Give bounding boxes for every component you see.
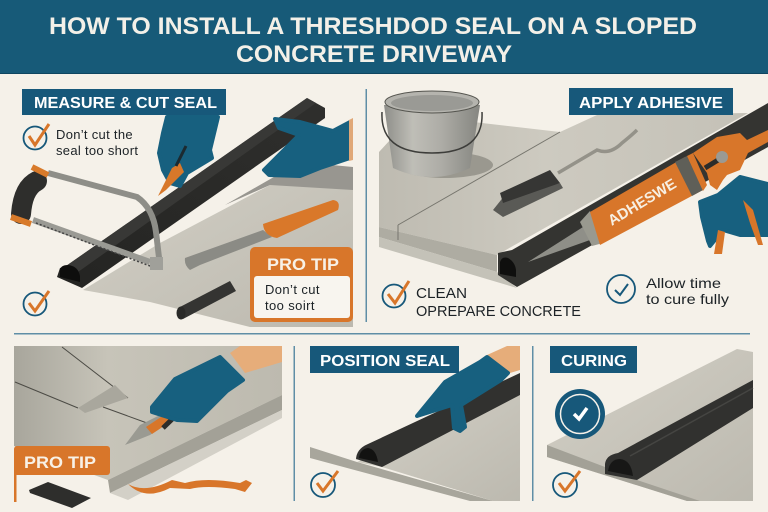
hand gripping seal — [264, 118, 353, 176]
tip: don't cut the seal too short: seal too short — [56, 143, 138, 158]
pro tip label — [14, 446, 110, 502]
rubber pad — [29, 482, 91, 508]
tip: allow time to cure fully — [607, 275, 729, 307]
pro tip label: PRO TIP — [24, 453, 96, 472]
rubber seal strip — [57, 98, 325, 288]
panel dividers — [14, 89, 750, 501]
tip: don't cut the seal too short — [24, 124, 138, 158]
check icon: curing — [553, 471, 580, 497]
title banner: CONCRETE DRIVEWAY — [236, 41, 512, 68]
step label: curing: CURING — [561, 353, 627, 370]
seal strip — [498, 103, 768, 287]
concrete surface — [83, 185, 353, 327]
step label: measure and cut seal — [22, 89, 226, 115]
step label: apply adhesive: APPLY ADHESIVE — [579, 95, 723, 112]
wire brush — [493, 130, 637, 217]
orange arrow — [128, 480, 252, 494]
step label: measure and cut seal: MEASURE & CUT SEAL — [34, 95, 217, 112]
pro tip box — [250, 247, 353, 322]
check icon: step 1 — [24, 291, 49, 316]
gloved hand — [417, 357, 508, 431]
check icon: position seal — [311, 471, 338, 497]
concrete — [547, 349, 753, 501]
seal — [605, 380, 753, 480]
hand with pencil — [158, 117, 218, 196]
panel: curing — [547, 349, 753, 501]
tip: allow time to cure fully: Allow time — [646, 275, 721, 291]
title banner: HOW TO INSTALL A THRESHDOD SEAL ON A SLOPED — [49, 13, 697, 40]
step label: curing — [550, 346, 637, 373]
hacksaw — [11, 167, 163, 270]
tip: don't cut the seal too short: Don’t cut the — [56, 127, 133, 142]
panel: measure and cut seal — [11, 98, 353, 327]
title banner — [0, 0, 768, 74]
caulk gun: ADHESWE — [605, 175, 679, 229]
pro tip box: Don’t cut — [265, 282, 320, 297]
seal — [356, 373, 520, 467]
step label: position seal — [310, 346, 459, 373]
metal bracket — [78, 385, 128, 413]
gloved hand — [700, 177, 768, 254]
concrete slab — [14, 346, 282, 500]
tip: allow time to cure fully: to cure fully — [646, 291, 729, 307]
concrete — [357, 393, 520, 501]
step label: position seal: POSITION SEAL — [320, 353, 450, 370]
panel: smoothing concrete with pro tip — [14, 346, 282, 502]
cut seal piece — [176, 281, 236, 320]
arm — [487, 346, 520, 373]
step label: apply adhesive — [569, 88, 733, 115]
pro tip box: PRO TIP — [267, 255, 339, 274]
panel: apply adhesive — [379, 91, 768, 288]
tip: clean prepare concrete — [382, 281, 581, 320]
tip: clean prepare concrete: CLEAN — [416, 285, 467, 302]
panel: position seal — [310, 346, 520, 501]
icon: curing badge — [555, 389, 605, 439]
bucket — [382, 91, 493, 178]
tip: clean prepare concrete: OPREPARE CONCRETE — [416, 303, 581, 320]
concrete slab — [379, 113, 748, 288]
pro tip box: too soirt — [265, 298, 315, 313]
chisel — [185, 200, 339, 270]
gloved hand with tool — [125, 346, 282, 445]
caulk gun — [528, 130, 768, 262]
